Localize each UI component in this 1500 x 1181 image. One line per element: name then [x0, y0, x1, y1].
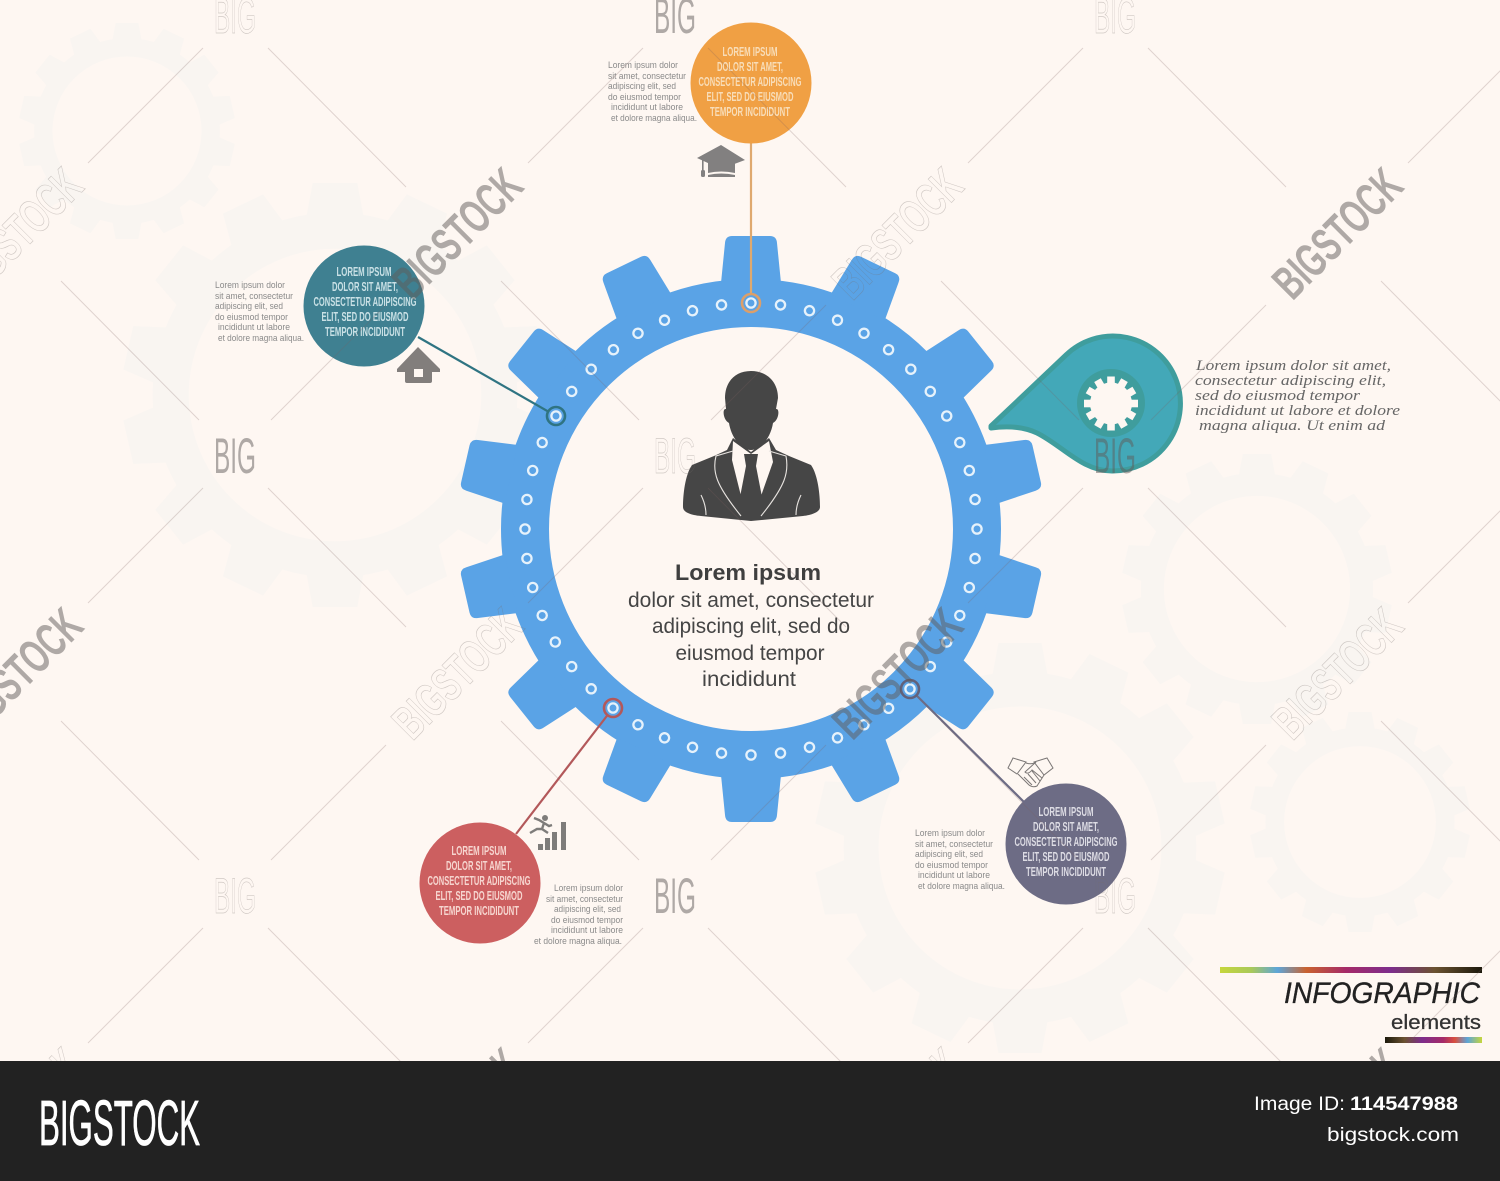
circle callout: purple: LOREM IPSUM	[1038, 804, 1094, 819]
teardrop pin with gear	[991, 336, 1180, 471]
text: BIG	[1094, 428, 1136, 484]
circle callout: teal: TEMPOR INCIDIDUNT	[325, 324, 405, 339]
circle callout: purple: CONSECTETUR ADIPISCING	[1014, 834, 1118, 849]
connector and marker: red	[516, 699, 622, 834]
text block: orange description: adipiscing elit, sed	[608, 81, 676, 91]
circle callout: teal: DOLOR SIT AMET,	[332, 279, 398, 294]
icon: handshake	[1008, 758, 1053, 787]
circle callout: red: DOLOR SIT AMET,	[446, 858, 512, 873]
text block: orange description	[608, 60, 697, 123]
icon: white gear	[1084, 376, 1138, 430]
circle callout: teal	[304, 246, 424, 366]
circle callout: purple	[1006, 784, 1126, 904]
watermark: BIG marks: BIG	[214, 868, 256, 924]
watermark: BIGSTOCK marks: BIGSTOCK	[823, 159, 974, 309]
circle callout: orange: TEMPOR INCIDIDUNT	[710, 104, 790, 119]
watermark: BIGSTOCK marks: CK	[1347, 1039, 1413, 1105]
circle callout: red: TEMPOR INCIDIDUNT	[439, 903, 519, 918]
watermark: BIG marks: BIG	[654, 868, 696, 924]
circle callout: purple: ELIT, SED DO EIUSMOD	[1022, 849, 1110, 864]
circle callout: orange: CONSECTETUR ADIPISCING	[698, 74, 802, 89]
text block: teal description: do eiusmod tempor	[215, 312, 288, 322]
text block: red description: sit amet, consectetur	[546, 894, 623, 904]
watermark: BIGSTOCK marks: BIGSTOCK	[1263, 159, 1414, 309]
text block: red description: adipiscing elit, sed	[554, 904, 621, 914]
footer image id: Image ID:	[1254, 1094, 1345, 1115]
watermark: BIG marks: BIG	[214, 428, 256, 484]
center text block: adipiscing elit, sed do	[652, 615, 850, 638]
circle callout: red: CONSECTETUR ADIPISCING	[428, 873, 530, 888]
text block: red description: et dolore magna aliqua.	[534, 936, 622, 946]
icon: businessman silhouette	[683, 371, 820, 521]
circle callout: orange: LOREM IPSUM	[722, 44, 778, 59]
text block: purple description: incididunt ut labore	[918, 870, 990, 880]
footer bar: BIGSTOCK	[39, 1087, 200, 1159]
watermark: BIGSTOCK marks: CK	[467, 1039, 533, 1105]
watermark: BIGSTOCK marks: BIGSTOCK	[1263, 599, 1414, 749]
text block: red description	[534, 883, 623, 946]
center text block: incididunt	[702, 668, 796, 691]
text block: orange description: incididunt ut labore	[611, 102, 683, 112]
text block: purple description: do eiusmod tempor	[915, 860, 988, 870]
watermark: BIGSTOCK marks: BIGSTOCK	[823, 599, 974, 749]
text block: orange description: Lorem ipsum dolor	[608, 60, 678, 70]
center text block	[628, 589, 874, 691]
main gear	[459, 236, 1043, 822]
watermark: BIGSTOCK marks: CK	[27, 1039, 93, 1105]
circle callout: purple: DOLOR SIT AMET,	[1033, 819, 1099, 834]
circle callout: orange: DOLOR SIT AMET,	[717, 59, 783, 74]
text block: orange description: do eiusmod tempor	[608, 92, 681, 102]
watermark: BIG marks	[214, 0, 1136, 924]
text block: teardrop description: Lorem ipsum dolor sit amet,	[1195, 358, 1391, 374]
connector and marker: purple	[901, 680, 1028, 806]
center text block: dolor sit amet, consectetur	[628, 589, 874, 612]
text block: red description: do eiusmod tempor	[551, 915, 623, 925]
footer bar	[0, 1061, 1500, 1181]
title: infographic elements: elements	[1391, 1012, 1481, 1034]
watermark: BIGSTOCK marks: CK	[907, 1039, 973, 1105]
circle callout: purple: TEMPOR INCIDIDUNT	[1026, 864, 1106, 879]
text block: teal description	[215, 280, 304, 343]
text: BIG	[1094, 868, 1136, 924]
icon: runner with rising bars	[530, 815, 566, 850]
text block: teardrop description: magna aliqua. Ut enim ad	[1199, 418, 1386, 434]
text block: purple description: adipiscing elit, sed	[915, 849, 983, 859]
circle callout: red: LOREM IPSUM	[452, 843, 506, 858]
text block: teal description: et dolore magna aliqua.	[218, 333, 304, 343]
text block: red description: incididunt ut labore	[551, 925, 623, 935]
text block: teal description: sit amet, consectetur	[215, 291, 293, 301]
title: infographic elements: INFOGRAPHIC	[1284, 977, 1480, 1010]
icon: house	[397, 347, 440, 383]
watermark: BIGSTOCK marks: BIGSTOCK	[383, 159, 534, 309]
text block: teal description: incididunt ut labore	[218, 322, 290, 332]
footer image id	[1254, 1094, 1458, 1115]
watermark: BIGSTOCK marks: BIGSTOCK	[383, 599, 534, 749]
title: infographic elements	[1220, 967, 1482, 1043]
footer image id: 114547988	[1350, 1094, 1458, 1115]
text block: orange description: et dolore magna aliqua.	[611, 113, 697, 123]
center text block: eiusmod tempor	[676, 642, 824, 665]
circle callout: red: ELIT, SED DO EIUSMOD	[436, 888, 522, 903]
watermark: BIGSTOCK marks	[0, 159, 1414, 1105]
text block: teardrop description: consectetur adipiscing elit,	[1195, 373, 1386, 389]
footer site: bigstock.com	[1327, 1124, 1459, 1146]
text block: teardrop description	[1195, 358, 1400, 434]
text block: red description: Lorem ipsum dolor	[554, 883, 623, 893]
text block: teal description: Lorem ipsum dolor	[215, 280, 285, 290]
connector and marker: teal	[418, 337, 565, 425]
text block: teardrop description: sed do eiusmod tempor	[1195, 388, 1360, 404]
circle callout: orange: ELIT, SED DO EIUSMOD	[706, 89, 794, 104]
circle callout: teal: ELIT, SED DO EIUSMOD	[322, 309, 408, 324]
text block: teal description: adipiscing elit, sed	[215, 301, 283, 311]
circle callout: orange	[690, 22, 812, 144]
text block: purple description: Lorem ipsum dolor	[915, 828, 985, 838]
text block: purple description	[915, 828, 1005, 891]
connector and marker: orange	[742, 140, 760, 312]
center heading: Lorem ipsum	[675, 560, 821, 585]
text block: teardrop description: incididunt ut labore et dolore	[1195, 403, 1400, 419]
text block: purple description: et dolore magna aliqua.	[918, 881, 1005, 891]
text block: orange description: sit amet, consectetur	[608, 71, 686, 81]
text block: purple description: sit amet, consectetur	[915, 839, 993, 849]
circle callout: red	[420, 822, 540, 944]
icon: graduation cap	[697, 145, 745, 177]
circle callout: teal: LOREM IPSUM	[336, 264, 392, 279]
circle callout: teal: CONSECTETUR ADIPISCING	[314, 294, 416, 309]
watermark: BIG marks: BIG	[654, 428, 696, 484]
